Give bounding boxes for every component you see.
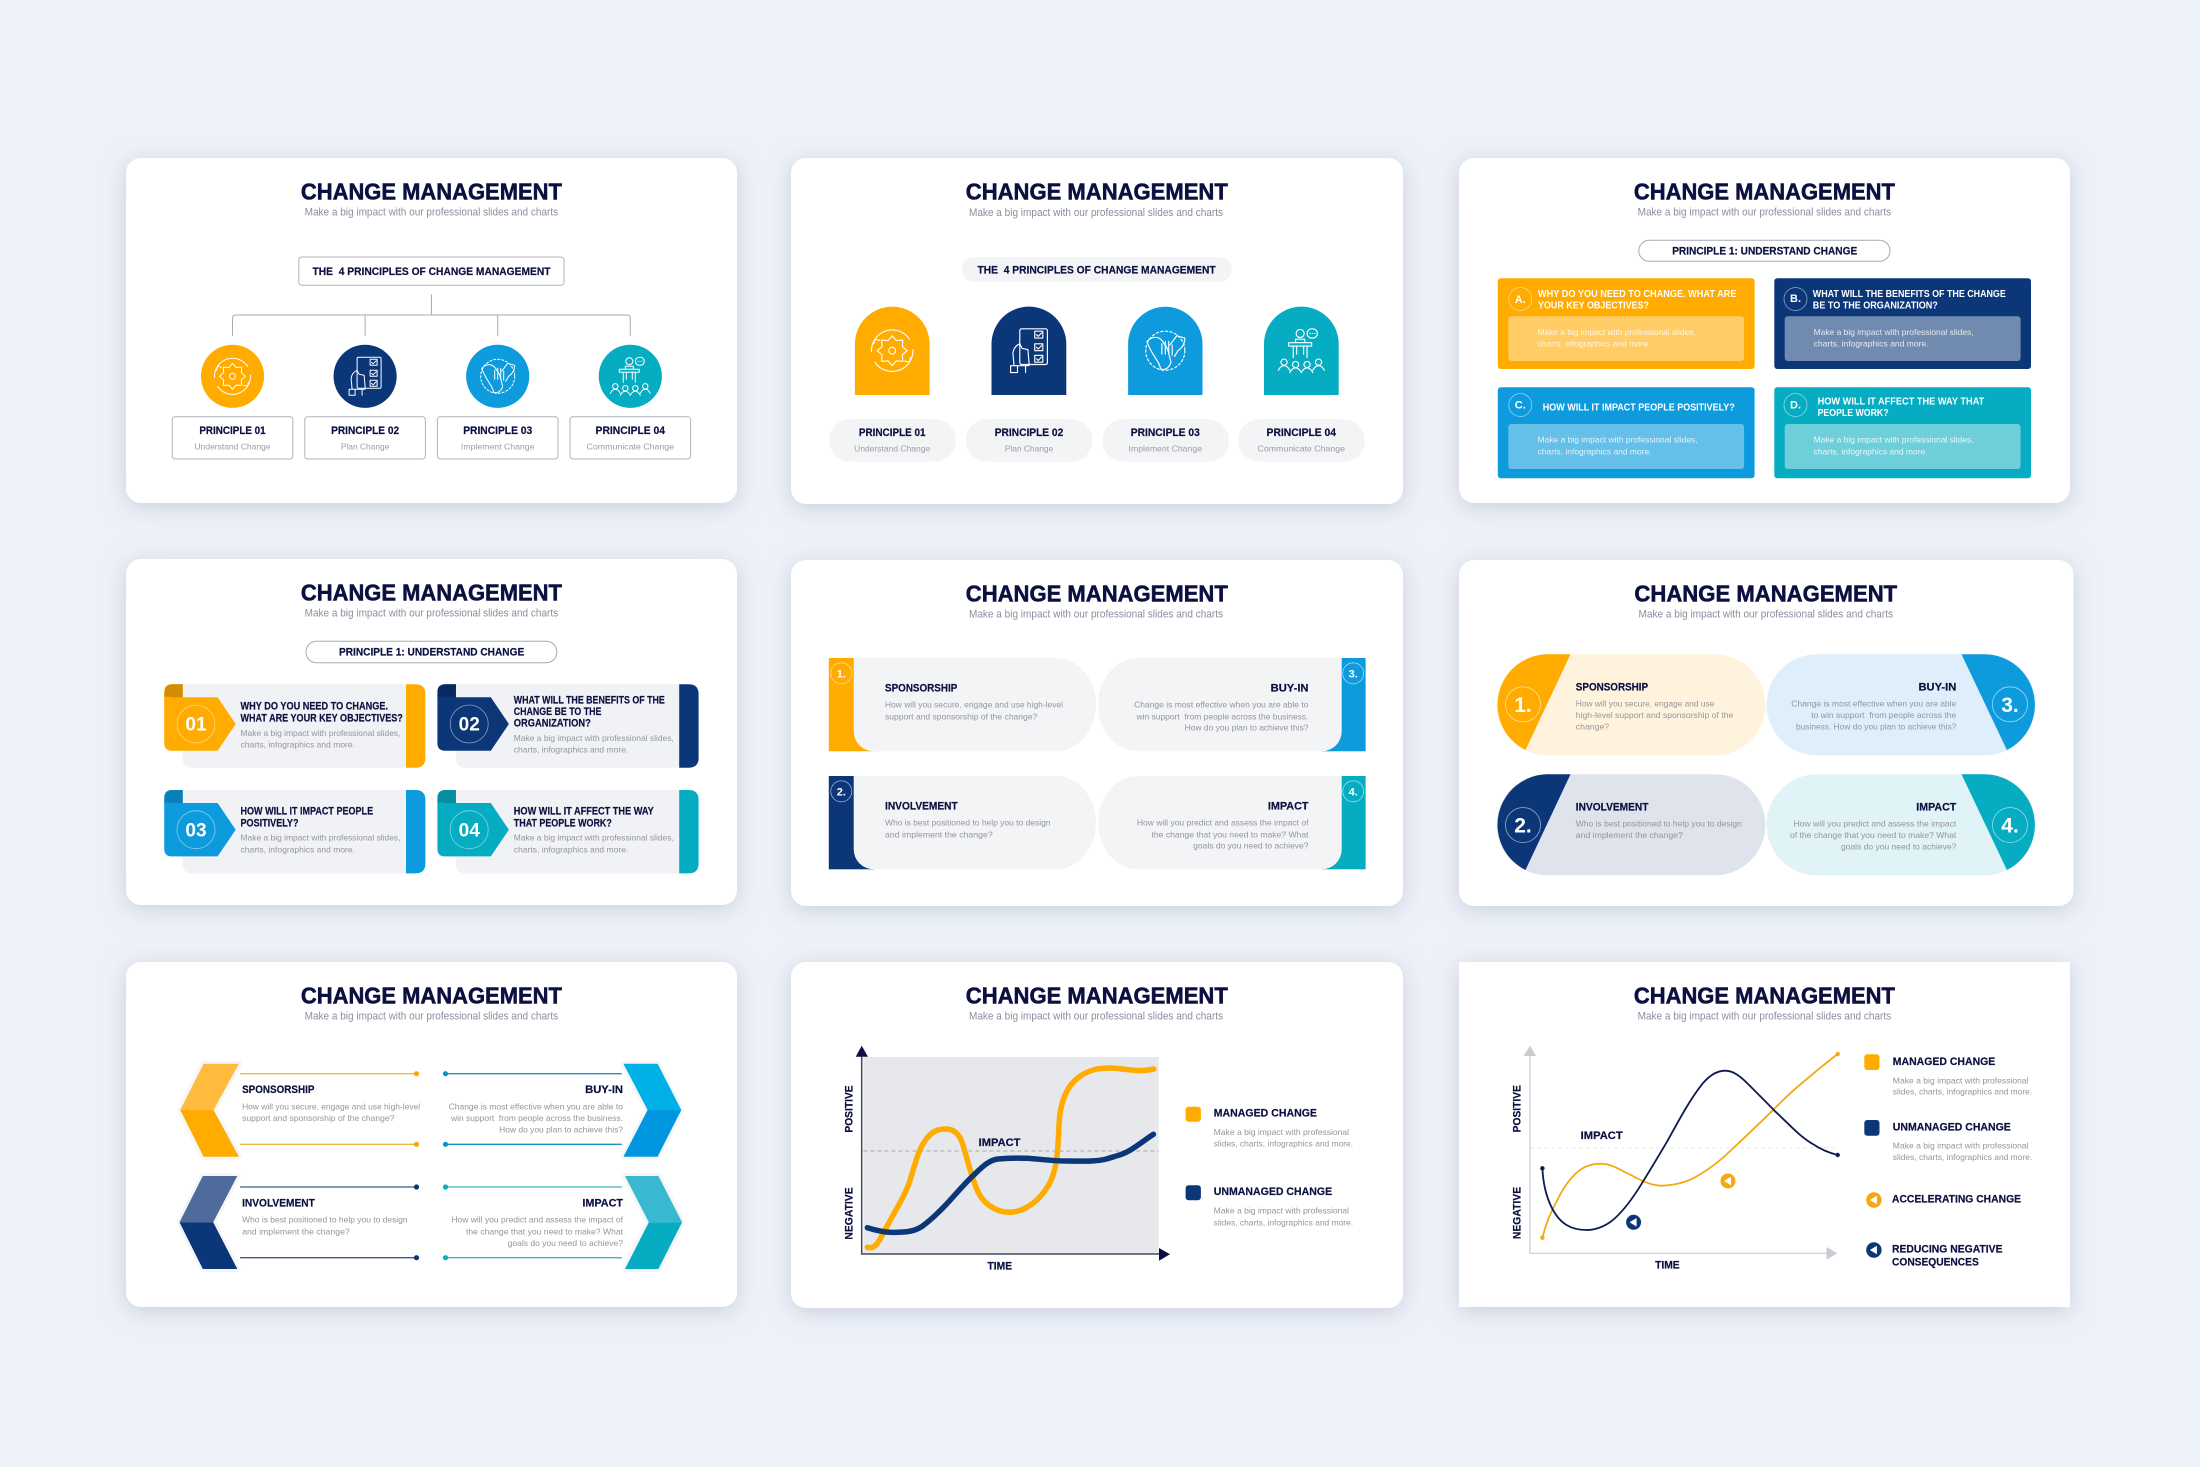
legend: accelerating change: ACCELERATING CHANGE	[1892, 1194, 2021, 1206]
item: sponsorship: support and sponsorship of the change?	[242, 1114, 395, 1123]
panel: principles arches	[791, 158, 1403, 504]
card 02: Make a big impact with professional slides,	[514, 734, 674, 743]
line chart: TIME	[1655, 1260, 1680, 1272]
card A: Make a big impact with professional slides,	[1538, 328, 1696, 337]
panel: pastel pill cards	[1459, 560, 2074, 906]
card B: charts, infographics and more.	[1814, 340, 1929, 349]
header pill: THE 4 PRINCIPLES OF CHANGE MANAGEMENT	[978, 264, 1216, 276]
principle 02 box: Plan Change	[341, 442, 390, 451]
panel: thick line chart	[791, 962, 1403, 1308]
principle 01 box: PRINCIPLE 01	[199, 425, 266, 437]
subtitle: Make a big impact with our professional slides and charts	[1638, 207, 1892, 219]
card 01: Make a big impact with professional slides,	[240, 729, 400, 738]
principle 03 box: Implement Change	[461, 442, 535, 451]
pill: involvement: and implement the change?	[1576, 831, 1683, 840]
legend: managed change: slides, charts, infographics and more.	[1214, 1140, 1353, 1149]
pill: impact: 4.	[2001, 815, 2019, 838]
header pill: PRINCIPLE 1: UNDERSTAND CHANGE	[339, 646, 524, 658]
subtitle: Make a big impact with our professional slides and charts	[305, 207, 559, 219]
card B: B.	[1790, 293, 1801, 305]
card D: Make a big impact with professional slides,	[1814, 436, 1974, 445]
legend: managed change: MANAGED CHANGE	[1893, 1056, 1995, 1068]
item: involvement	[180, 1176, 419, 1269]
line chart: POSITIVE	[1511, 1085, 1523, 1132]
card: impact: 4.	[1349, 786, 1358, 798]
card A: YOUR KEY OBJECTIVES?	[1538, 300, 1649, 311]
card 02	[437, 684, 699, 768]
card: involvement: and implement the change?	[885, 830, 993, 839]
card 04: 04	[459, 820, 480, 841]
pill: buy-in	[1767, 654, 2035, 755]
line chart	[844, 1046, 1170, 1272]
line chart: NEGATIVE	[1511, 1187, 1523, 1239]
icon: hands globe circle	[466, 345, 529, 408]
pill: buy-in: 3.	[2001, 694, 2019, 717]
pill: buy-in: to win support from people across the	[1811, 711, 1957, 720]
line chart: POSITIVE	[844, 1085, 856, 1133]
panel: question cards	[1459, 158, 2070, 503]
card A	[1498, 278, 1755, 369]
card 03	[164, 790, 425, 873]
card 04	[437, 790, 699, 873]
card C	[1498, 387, 1755, 478]
legend: unmanaged change: UNMANAGED CHANGE	[1214, 1186, 1332, 1198]
icon: checklist arch	[992, 307, 1066, 395]
legend: managed change	[1186, 1107, 1353, 1149]
card A: WHY DO YOU NEED TO CHANGE. WHAT ARE	[1538, 289, 1737, 300]
icon: checklist circle	[334, 345, 397, 408]
card 03: charts, infographics and more.	[240, 845, 355, 854]
principle 03 box	[437, 417, 558, 459]
principle 02 pill: Plan Change	[1005, 445, 1054, 454]
panel: numbered tag cards	[126, 559, 737, 905]
legend: unmanaged change: slides, charts, infographics and more.	[1214, 1218, 1353, 1227]
principle 03 pill: PRINCIPLE 03	[1131, 427, 1200, 439]
legend: managed change: MANAGED CHANGE	[1214, 1108, 1317, 1120]
pill: sponsorship: How will you secure, engage and use	[1576, 699, 1715, 708]
icon: hands globe arch	[1128, 307, 1202, 395]
item: sponsorship: How will you secure, engage and use high-level	[242, 1102, 420, 1111]
item: buy-in: Change is most effective when you are able to	[449, 1102, 623, 1111]
legend: managed change: Make a big impact with professional	[1214, 1128, 1349, 1137]
card: involvement: 2.	[837, 786, 846, 798]
item: buy-in: win support from people across the business.	[450, 1114, 623, 1123]
pill: sponsorship: 1.	[1514, 694, 1532, 717]
card D: charts, infographics and more.	[1814, 447, 1928, 456]
card: impact: How will you predict and assess the impact of	[1137, 819, 1309, 828]
pill: sponsorship: high-level support and sponsorship of the	[1576, 711, 1734, 720]
principle 01 pill: Understand Change	[854, 445, 931, 454]
card: buy-in: How do you plan to achieve this?	[1185, 724, 1309, 733]
legend: unmanaged change	[1186, 1185, 1353, 1227]
card: sponsorship	[829, 658, 1096, 751]
subtitle: Make a big impact with our professional slides and charts	[305, 1010, 559, 1022]
card: buy-in: Change is most effective when you are able to	[1134, 701, 1309, 710]
principle 01 box	[172, 417, 293, 459]
pill: impact: How will you predict and assess the impact	[1794, 819, 1957, 828]
card: impact	[1098, 776, 1366, 869]
pill: involvement	[1497, 774, 1765, 875]
line chart: IMPACT	[1581, 1130, 1623, 1142]
card 03: POSITIVELY?	[240, 817, 298, 829]
icon: gear circle	[201, 345, 264, 408]
icon: gear arch	[855, 307, 930, 395]
pill: buy-in: BUY-IN	[1918, 681, 1957, 693]
card B: BE TO THE ORGANIZATION?	[1813, 300, 1938, 311]
pill: involvement: INVOLVEMENT	[1576, 801, 1649, 813]
subtitle: Make a big impact with our professional slides and charts	[969, 609, 1223, 621]
subtitle: Make a big impact with our professional slides and charts	[1638, 1010, 1892, 1022]
principle 04 pill: PRINCIPLE 04	[1267, 427, 1336, 439]
title: CHANGE MANAGEMENT	[1634, 580, 1898, 606]
pill: impact: of the change that you need to make? What	[1790, 831, 1957, 840]
header pill	[306, 641, 557, 663]
card 04: HOW WILL IT AFFECT THE WAY	[514, 806, 654, 818]
title: CHANGE MANAGEMENT	[1634, 178, 1895, 204]
panel: principles org chart	[126, 158, 737, 503]
card 03: 03	[185, 820, 207, 841]
legend: managed change: Make a big impact with professional	[1893, 1076, 2029, 1085]
principle 02 box	[305, 417, 425, 459]
principle 03 box: PRINCIPLE 03	[463, 425, 532, 437]
subtitle: Make a big impact with our professional slides and charts	[969, 207, 1223, 219]
item: impact: goals do you need to achieve?	[508, 1239, 623, 1248]
card: impact: goals do you need to achieve?	[1193, 842, 1309, 851]
principle 04 box: Communicate Change	[587, 442, 675, 451]
pill: buy-in: business. How do you plan to achieve this?	[1796, 723, 1957, 732]
icon: speaker arch	[1264, 307, 1339, 395]
card B: Make a big impact with professional slides,	[1814, 328, 1974, 337]
card 04: THAT PEOPLE WORK?	[514, 817, 612, 829]
legend: accelerating change	[1866, 1192, 2021, 1208]
item: buy-in	[443, 1064, 681, 1157]
card 01	[164, 684, 425, 768]
pill: sponsorship	[1497, 654, 1765, 755]
principle 01 box: Understand Change	[194, 442, 271, 451]
line chart: IMPACT	[979, 1137, 1021, 1149]
legend: reducing negative consequences: CONSEQUENCES	[1892, 1257, 1979, 1269]
card: sponsorship: support and sponsorship of the change?	[885, 712, 1038, 721]
item: sponsorship: SPONSORSHIP	[242, 1084, 314, 1096]
card 02: ORGANIZATION?	[514, 717, 591, 729]
card 01: 01	[185, 715, 207, 736]
principle 02 pill: PRINCIPLE 02	[995, 427, 1063, 439]
item: impact: How will you predict and assess the impact of	[451, 1216, 624, 1225]
card C: charts, infographics and more.	[1538, 447, 1652, 456]
card: involvement: INVOLVEMENT	[885, 801, 958, 813]
pill: impact: goals do you need to achieve?	[1841, 843, 1957, 852]
pill: involvement: 2.	[1514, 815, 1532, 838]
legend: unmanaged change: UNMANAGED CHANGE	[1893, 1121, 2011, 1133]
line chart	[1511, 1046, 1840, 1272]
principle 02 pill	[966, 419, 1092, 462]
card 02: charts, infographics and more.	[514, 746, 628, 755]
card B	[1774, 278, 2031, 369]
legend: unmanaged change	[1864, 1120, 2032, 1162]
subtitle: Make a big impact with our professional slides and charts	[969, 1010, 1223, 1022]
pill: involvement: Who is best positioned to help you to design	[1576, 819, 1742, 828]
card: buy-in: 3.	[1349, 668, 1358, 680]
legend: managed change: slides, charts, infographics and more.	[1893, 1088, 2032, 1097]
card D: D.	[1790, 400, 1801, 412]
card: involvement	[829, 776, 1096, 869]
title: CHANGE MANAGEMENT	[301, 983, 562, 1009]
card D: HOW WILL IT AFFECT THE WAY THAT	[1818, 397, 1985, 408]
card A: A.	[1515, 294, 1526, 306]
card: sponsorship: 1.	[837, 668, 846, 680]
item: involvement: and implement the change?	[242, 1227, 350, 1236]
item: buy-in: BUY-IN	[585, 1084, 623, 1096]
header pill	[962, 257, 1232, 282]
icon: speaker circle	[599, 345, 662, 408]
card B: WHAT WILL THE BENEFITS OF THE CHANGE	[1813, 289, 2006, 300]
legend: managed change	[1864, 1054, 2032, 1097]
title: CHANGE MANAGEMENT	[301, 579, 562, 605]
item: involvement: Who is best positioned to help you to design	[242, 1216, 408, 1225]
pill: impact	[1767, 774, 2035, 875]
card C: Make a big impact with professional slides,	[1538, 436, 1698, 445]
card A: charts, infographics and more.	[1538, 340, 1651, 349]
header pill	[1639, 240, 1890, 261]
principle 04 box: PRINCIPLE 04	[596, 425, 665, 437]
legend: reducing negative consequences: REDUCING NEGATIVE	[1892, 1244, 2002, 1256]
connector lines	[232, 294, 630, 336]
card 01: charts, infographics and more.	[240, 741, 355, 750]
principle 04 pill: Communicate Change	[1258, 445, 1346, 454]
title: CHANGE MANAGEMENT	[966, 580, 1228, 606]
card D: PEOPLE WORK?	[1818, 408, 1889, 419]
card: impact: the change that you need to make? What	[1152, 830, 1309, 839]
principle 01 pill: PRINCIPLE 01	[859, 427, 926, 439]
card: buy-in: BUY-IN	[1271, 683, 1309, 695]
panel: thin line chart	[1459, 962, 2070, 1307]
card 03: HOW WILL IT IMPACT PEOPLE	[240, 806, 373, 818]
pill: sponsorship: change?	[1576, 723, 1610, 732]
card 01: WHY DO YOU NEED TO CHANGE.	[240, 701, 388, 713]
pill: sponsorship: SPONSORSHIP	[1576, 681, 1648, 693]
principle 03 pill: Implement Change	[1129, 445, 1203, 454]
card 03: Make a big impact with professional slides,	[240, 834, 400, 843]
card: involvement: Who is best positioned to help you to design	[885, 819, 1051, 828]
panel: chevron items	[126, 962, 737, 1307]
header pill: PRINCIPLE 1: UNDERSTAND CHANGE	[1672, 245, 1857, 257]
card: buy-in: win support from people across the business.	[1135, 712, 1308, 721]
item: impact	[443, 1176, 682, 1269]
card: buy-in	[1098, 658, 1366, 751]
card 04: charts, infographics and more.	[514, 845, 628, 854]
item: buy-in: How do you plan to achieve this?	[499, 1125, 623, 1134]
title: CHANGE MANAGEMENT	[966, 983, 1228, 1009]
subtitle: Make a big impact with our professional slides and charts	[305, 608, 559, 620]
card: sponsorship: SPONSORSHIP	[885, 683, 957, 695]
card: sponsorship: How will you secure, engage and use high-level	[885, 701, 1063, 710]
card 02: 02	[459, 715, 480, 736]
line chart: TIME	[988, 1260, 1012, 1272]
item: impact: the change that you need to make? What	[466, 1227, 624, 1236]
card C: HOW WILL IT IMPACT PEOPLE POSITIVELY?	[1543, 402, 1735, 413]
card 01: WHAT ARE YOUR KEY OBJECTIVES?	[240, 712, 403, 724]
card 02: WHAT WILL THE BENEFITS OF THE	[514, 694, 665, 706]
panel: rounded grey cards	[791, 560, 1403, 906]
principle 01 pill	[829, 419, 956, 462]
header box	[299, 257, 564, 285]
title: CHANGE MANAGEMENT	[1634, 983, 1895, 1009]
card: impact: IMPACT	[1268, 801, 1309, 813]
card D	[1774, 387, 2031, 478]
title: CHANGE MANAGEMENT	[301, 178, 562, 204]
principle 03 pill	[1102, 419, 1229, 462]
item: involvement: INVOLVEMENT	[242, 1198, 315, 1210]
legend: unmanaged change: Make a big impact with professional	[1214, 1207, 1349, 1216]
card C: C.	[1515, 400, 1526, 412]
line chart: NEGATIVE	[844, 1187, 856, 1240]
header box: THE 4 PRINCIPLES OF CHANGE MANAGEMENT	[312, 266, 551, 278]
legend: unmanaged change: Make a big impact with professional	[1893, 1142, 2029, 1151]
title: CHANGE MANAGEMENT	[966, 178, 1228, 204]
principle 02 box: PRINCIPLE 02	[331, 425, 399, 437]
legend: unmanaged change: slides, charts, infographics and more.	[1893, 1153, 2032, 1162]
subtitle: Make a big impact with our professional slides and charts	[1639, 609, 1893, 621]
card 02: CHANGE BE TO THE	[514, 706, 601, 718]
item: impact: IMPACT	[582, 1198, 623, 1210]
pill: impact: IMPACT	[1916, 801, 1957, 813]
principle 04 box	[570, 417, 691, 459]
item: sponsorship	[180, 1064, 420, 1157]
pill: buy-in: Change is most effective when you are able	[1791, 699, 1957, 708]
legend: reducing negative consequences	[1866, 1242, 2002, 1269]
card 04: Make a big impact with professional slides,	[514, 834, 674, 843]
principle 04 pill	[1238, 419, 1365, 462]
